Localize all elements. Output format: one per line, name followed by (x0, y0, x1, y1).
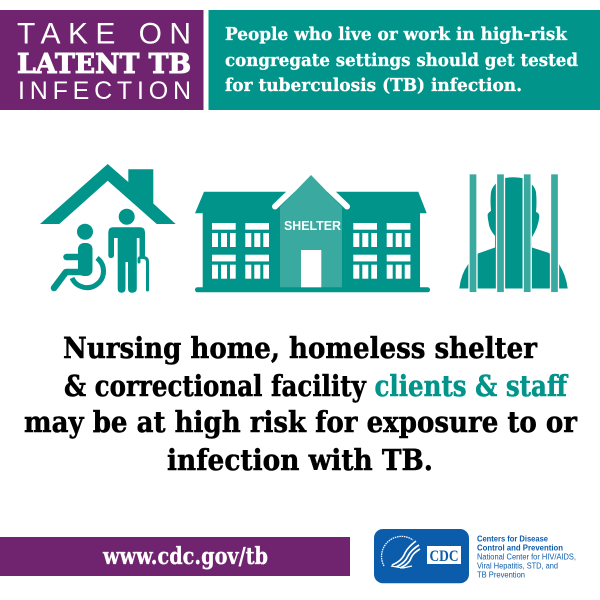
CDC agency text: Viral Hepatitis, STD, and (477, 560, 558, 570)
CDC agency text: TB Prevention (477, 570, 525, 580)
windows (212, 223, 410, 279)
header panel: who should get tested: People who live or work in high-risk (225, 24, 567, 45)
person in wheelchair (54, 224, 103, 288)
CDC agency text (477, 534, 576, 580)
CDC agency text: Centers for Disease (477, 534, 548, 544)
house roof and chimney (40, 164, 176, 224)
CDC logo (374, 529, 469, 583)
icon: person behind bars (459, 174, 568, 293)
CDC agency text: National Center for HIV/AIDS, (477, 552, 576, 562)
icon: homeless shelter building (195, 172, 430, 292)
header panel: who should get tested (208, 10, 600, 110)
URL bar: www.cdc.gov/tb (102, 543, 268, 570)
standing man with cane (108, 209, 148, 293)
title panel: Take on latent TB infection: TAKE ON (17, 18, 191, 50)
main message text: Nursing home, homeless shelter (63, 331, 538, 365)
CDC agency text: Control and Prevention (477, 542, 563, 552)
HHS eagle seal (382, 536, 420, 568)
prison bars (469, 174, 558, 293)
icon: nursing home (40, 164, 176, 293)
door (301, 250, 321, 287)
main message text (24, 331, 578, 477)
title panel: Take on latent TB infection (0, 10, 204, 110)
main message text: infection with TB. (167, 443, 433, 477)
header panel: who should get tested: for tuberculosis (TB) infection. (225, 75, 522, 96)
main message text: & correctional facility clients & staff (64, 369, 569, 403)
CDC mark: CDC (430, 548, 458, 565)
shelter label: SHELTER (284, 218, 342, 233)
URL bar (0, 537, 350, 576)
header panel: who should get tested: congregate settings should get tested (225, 50, 578, 71)
title panel: Take on latent TB infection: LATENT TB (17, 49, 191, 80)
title panel: Take on latent TB infection: INFECTION (18, 77, 191, 105)
